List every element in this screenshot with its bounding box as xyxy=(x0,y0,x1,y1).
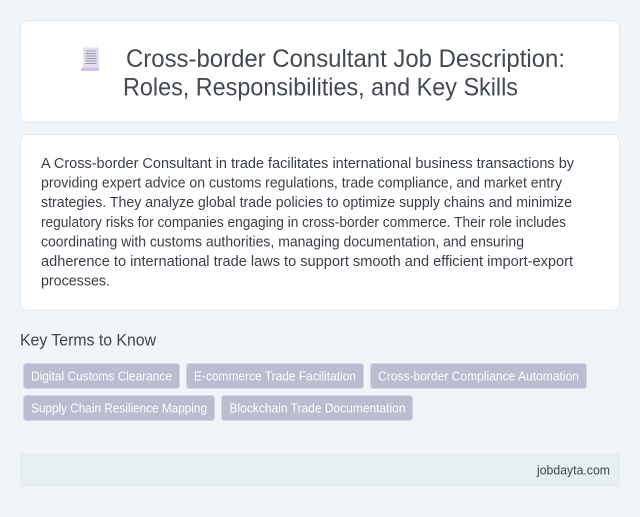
tag: digital customs clearance xyxy=(24,364,180,388)
tag: blockchain trade documentation xyxy=(222,396,412,420)
tag: supply chain resilience mapping: Supply Chain Resilience Mapping xyxy=(31,402,207,416)
text block: description: providing expert advice on customs regulations, trade compliance, and market entry xyxy=(41,174,562,192)
text block: description: strategies. They analyze global trade policies to optimize supply chains and minimize xyxy=(41,194,572,211)
tag: cross-border compliance automation: Cross-border Compliance Automation xyxy=(378,370,579,384)
tag: supply chain resilience mapping xyxy=(24,396,214,420)
panel: description xyxy=(20,134,620,310)
text block: description: adherence to international trade laws to support smooth and efficient import-export xyxy=(41,253,574,270)
tag: cross-border compliance automation xyxy=(370,364,586,388)
heading: key terms: Key Terms to Know xyxy=(20,330,157,350)
tag: e-commerce trade facilitation xyxy=(186,364,364,388)
panel: title card xyxy=(20,20,620,122)
title: Roles, Responsibilities, and Key Skills xyxy=(123,74,518,102)
tag: blockchain trade documentation: Blockchain Trade Documentation xyxy=(230,402,406,416)
footer bar xyxy=(20,453,620,487)
text block: description xyxy=(41,155,574,290)
icon: document receipt xyxy=(81,48,99,71)
footer bar: jobdayta.com xyxy=(536,464,610,478)
tag: e-commerce trade facilitation: E-commerce Trade Facilitation xyxy=(194,370,356,384)
text block: description: processes. xyxy=(41,272,110,290)
text block: description: A Cross-border Consultant in trade facilitates international business transactions by xyxy=(41,155,574,172)
tag: digital customs clearance: Digital Customs Clearance xyxy=(31,370,172,384)
text block: description: regulatory risks for companies engaging in cross-border commerce. Their role includes xyxy=(41,214,566,231)
text block: description: coordinating with customs authorities, managing documentation, and ensuring xyxy=(41,234,524,250)
title: Cross-border Consultant Job Description: xyxy=(126,45,565,73)
title xyxy=(123,45,565,102)
